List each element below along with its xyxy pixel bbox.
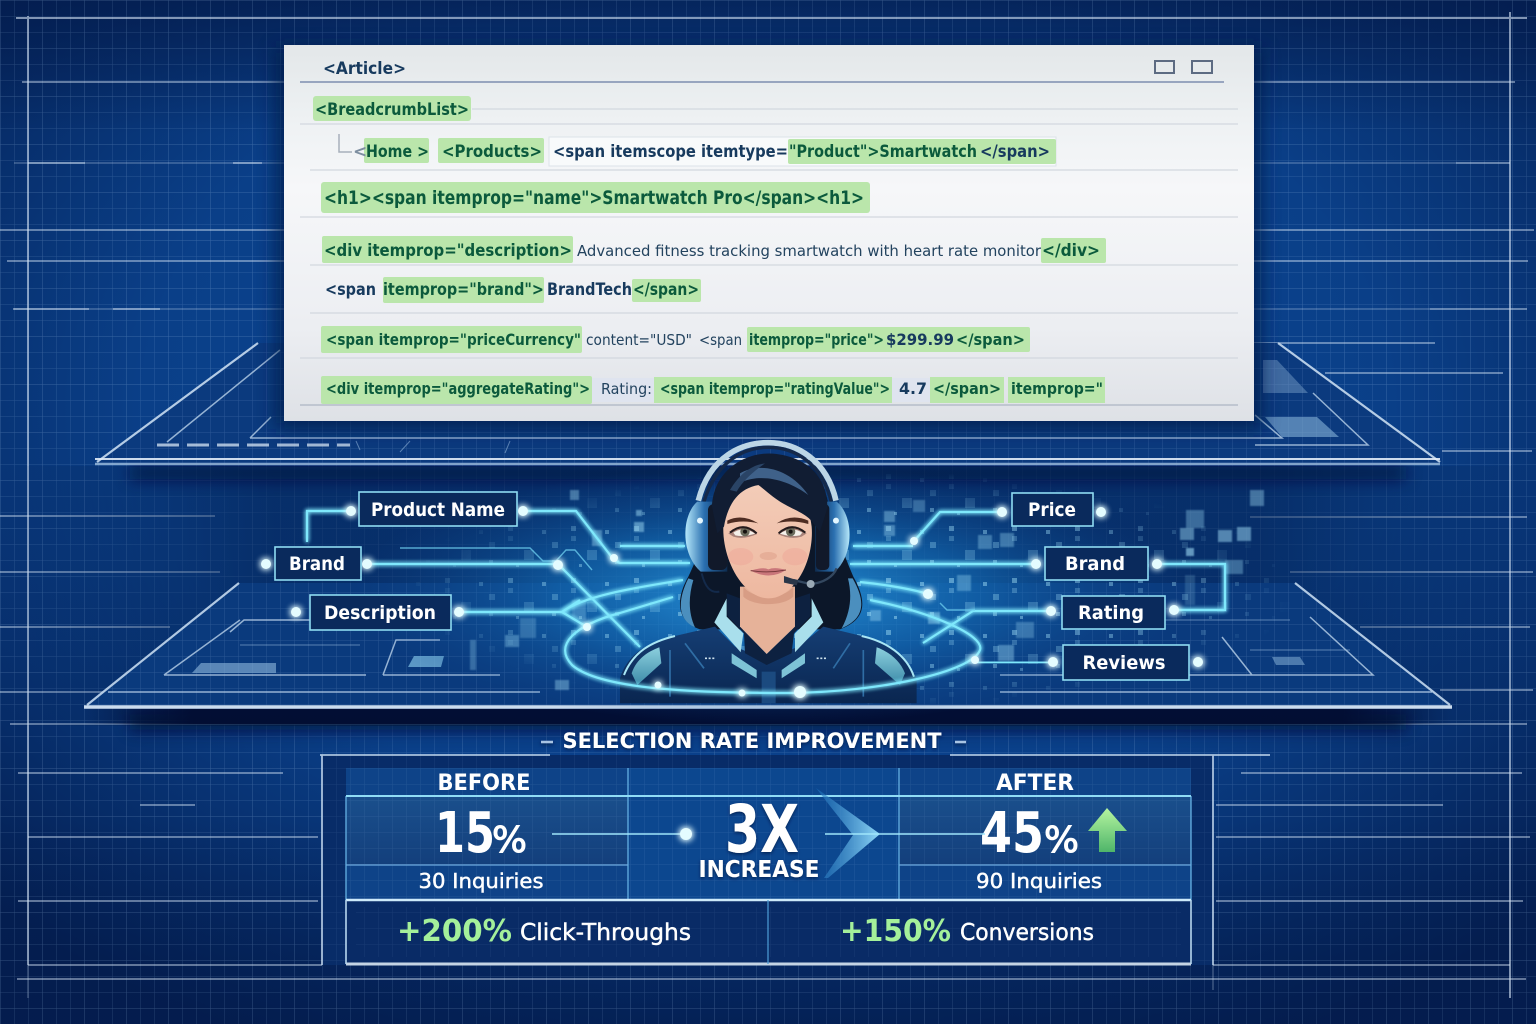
code row: brand: BrandTech — [547, 280, 632, 300]
card: after — [899, 768, 1191, 900]
data pixel field — [470, 490, 1264, 690]
code row: price: itemprop="price"> — [749, 330, 884, 349]
code row: breadcrumb items: Home > — [366, 142, 429, 162]
label: reviews: Reviews — [1082, 652, 1166, 674]
code row: price: </span> — [956, 330, 1025, 349]
code row: rating: 4.7 — [899, 379, 927, 398]
code row: breadcrumb items: <Products> — [442, 142, 542, 162]
wire: reviews link — [975, 662, 1053, 663]
microphone — [793, 568, 837, 584]
code row: brand: itemprop="brand"> — [383, 280, 544, 300]
face — [723, 485, 812, 598]
label: brand right: Brand — [1065, 553, 1125, 575]
code row: rating — [321, 376, 1105, 404]
platform: lower blueprint plane — [84, 583, 1452, 730]
code document panel — [276, 45, 1262, 429]
connector wires — [307, 511, 1225, 647]
card: before: BEFORE — [438, 771, 530, 796]
card: before: 30 Inquiries — [418, 869, 544, 893]
label: reviews — [1063, 645, 1189, 680]
code row: description: Advanced fitness tracking smartwatch with heart rate monitor — [577, 242, 1042, 260]
code row: heading — [321, 182, 870, 213]
code row: breadcrumb items — [353, 137, 1056, 166]
stat: 3X increase: INCREASE — [698, 857, 820, 883]
orbit ring: back arcs — [562, 580, 928, 612]
collar — [714, 598, 823, 652]
code row: rating: Rating: — [601, 380, 652, 398]
card: before: 15 — [435, 801, 495, 866]
code row: price: <span itemprop="priceCurrency" — [326, 330, 581, 349]
card: before — [346, 768, 628, 900]
code row: rating: </span> — [933, 379, 1001, 398]
label: price: Price — [1028, 499, 1076, 521]
label: rating — [1062, 596, 1165, 629]
platform: upper blueprint plane — [95, 343, 1440, 480]
character: headset assistant — [620, 443, 917, 703]
stats row — [346, 900, 1191, 964]
code row: price: <span — [699, 331, 742, 349]
jacket body — [620, 627, 917, 703]
card: after: AFTER — [996, 771, 1074, 796]
code row: breadcrumb items: </span> — [980, 142, 1050, 162]
label: brand left — [275, 547, 361, 580]
orbit ring: front loop — [565, 597, 980, 693]
hair back — [680, 459, 862, 629]
window control icons — [1155, 61, 1212, 73]
headband — [698, 443, 836, 501]
icon: chevron arrow — [816, 788, 880, 878]
icon: green up arrow — [1088, 808, 1127, 852]
heading: SELECTION RATE IMPROVEMENT — [562, 729, 942, 753]
stat: 3X increase — [698, 791, 820, 883]
label: brand right — [1045, 547, 1148, 580]
code row: description: <div itemprop="description> — [324, 241, 572, 261]
code row: breadcrumb items: "Product">Smartwatch — [789, 142, 977, 162]
code row: breadcrumb items: <span itemscope itemtype= — [553, 142, 788, 162]
code row: brand: <span — [325, 280, 376, 300]
nose and mouth — [760, 552, 777, 560]
code row: price: content="USD" — [586, 331, 692, 349]
stat: click-throughs: +200% — [397, 914, 512, 949]
hair fringe — [712, 453, 827, 533]
code row: brand: </span> — [633, 280, 699, 300]
neck — [740, 587, 795, 654]
stat: click-throughs — [397, 914, 691, 949]
card: after: % — [1044, 820, 1079, 861]
code row: heading: <h1><span itemprop="name">Smartwatch Pro</span><h1> — [324, 187, 864, 209]
stat: 3X increase: 3X — [725, 791, 799, 868]
label: description — [310, 595, 451, 630]
label: brand left: Brand — [289, 553, 345, 575]
stat: conversions — [840, 914, 1094, 949]
stat: conversions: Conversions — [960, 920, 1094, 946]
label: rating: Rating — [1078, 602, 1144, 624]
stat: click-throughs: Click-Throughs — [520, 920, 691, 946]
code row: brand — [325, 277, 701, 303]
panel: selection rate improvement — [320, 729, 1270, 965]
label: price — [1012, 493, 1093, 526]
card: after: 90 Inquiries — [976, 869, 1102, 893]
connector nodes — [261, 506, 1203, 698]
connector line with node — [552, 828, 985, 840]
article tag: <Article> — [323, 59, 406, 79]
code row: price — [321, 326, 1030, 353]
code row: description — [322, 236, 1106, 263]
card: after: 45 — [980, 801, 1044, 866]
code row: breadcrumb items: < — [353, 142, 367, 162]
code row: rating: <span itemprop="ratingValue"> — [660, 379, 890, 398]
label: product name — [359, 492, 517, 526]
code row: breadcrumb list: <BreadcrumbList> — [315, 100, 469, 120]
label: product name: Product Name — [371, 499, 505, 521]
stat: conversions: +150% — [840, 914, 951, 949]
code row: description: </div> — [1042, 241, 1100, 261]
code row: rating: <div itemprop="aggregateRating"> — [326, 379, 590, 398]
card: before: % — [492, 820, 527, 861]
code row: rating: itemprop=" — [1011, 379, 1103, 398]
eyes and brows — [727, 518, 808, 524]
left ear cup — [685, 502, 727, 572]
label: description: Description — [324, 602, 436, 624]
right ear cup — [815, 502, 850, 572]
code row: price: $299.99 — [886, 330, 954, 349]
